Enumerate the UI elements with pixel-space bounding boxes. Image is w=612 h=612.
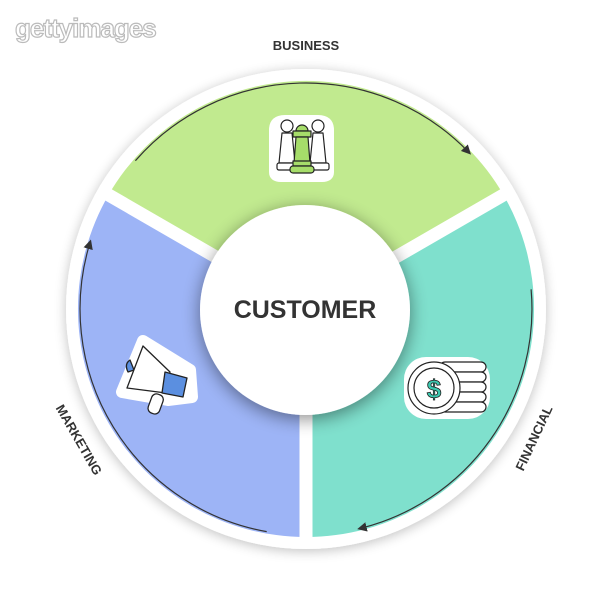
watermark logo: gettyimages [15, 13, 156, 43]
center title: CUSTOMER [234, 296, 376, 324]
label: financial: FINANCIAL [512, 403, 556, 473]
cycle diagram [78, 81, 534, 545]
label: marketing: MARKETING [53, 402, 105, 478]
icon: megaphone [122, 341, 192, 415]
segment: marketing [78, 195, 306, 537]
icon: coins [404, 357, 490, 419]
segment: business [108, 81, 504, 309]
segment: financial [306, 195, 534, 537]
icon: chess [272, 118, 331, 179]
icon: coins: $ [427, 374, 442, 404]
arrows [80, 83, 532, 532]
label: business: BUSINESS [273, 38, 340, 53]
center circle [200, 205, 410, 415]
outer ring [66, 69, 546, 549]
